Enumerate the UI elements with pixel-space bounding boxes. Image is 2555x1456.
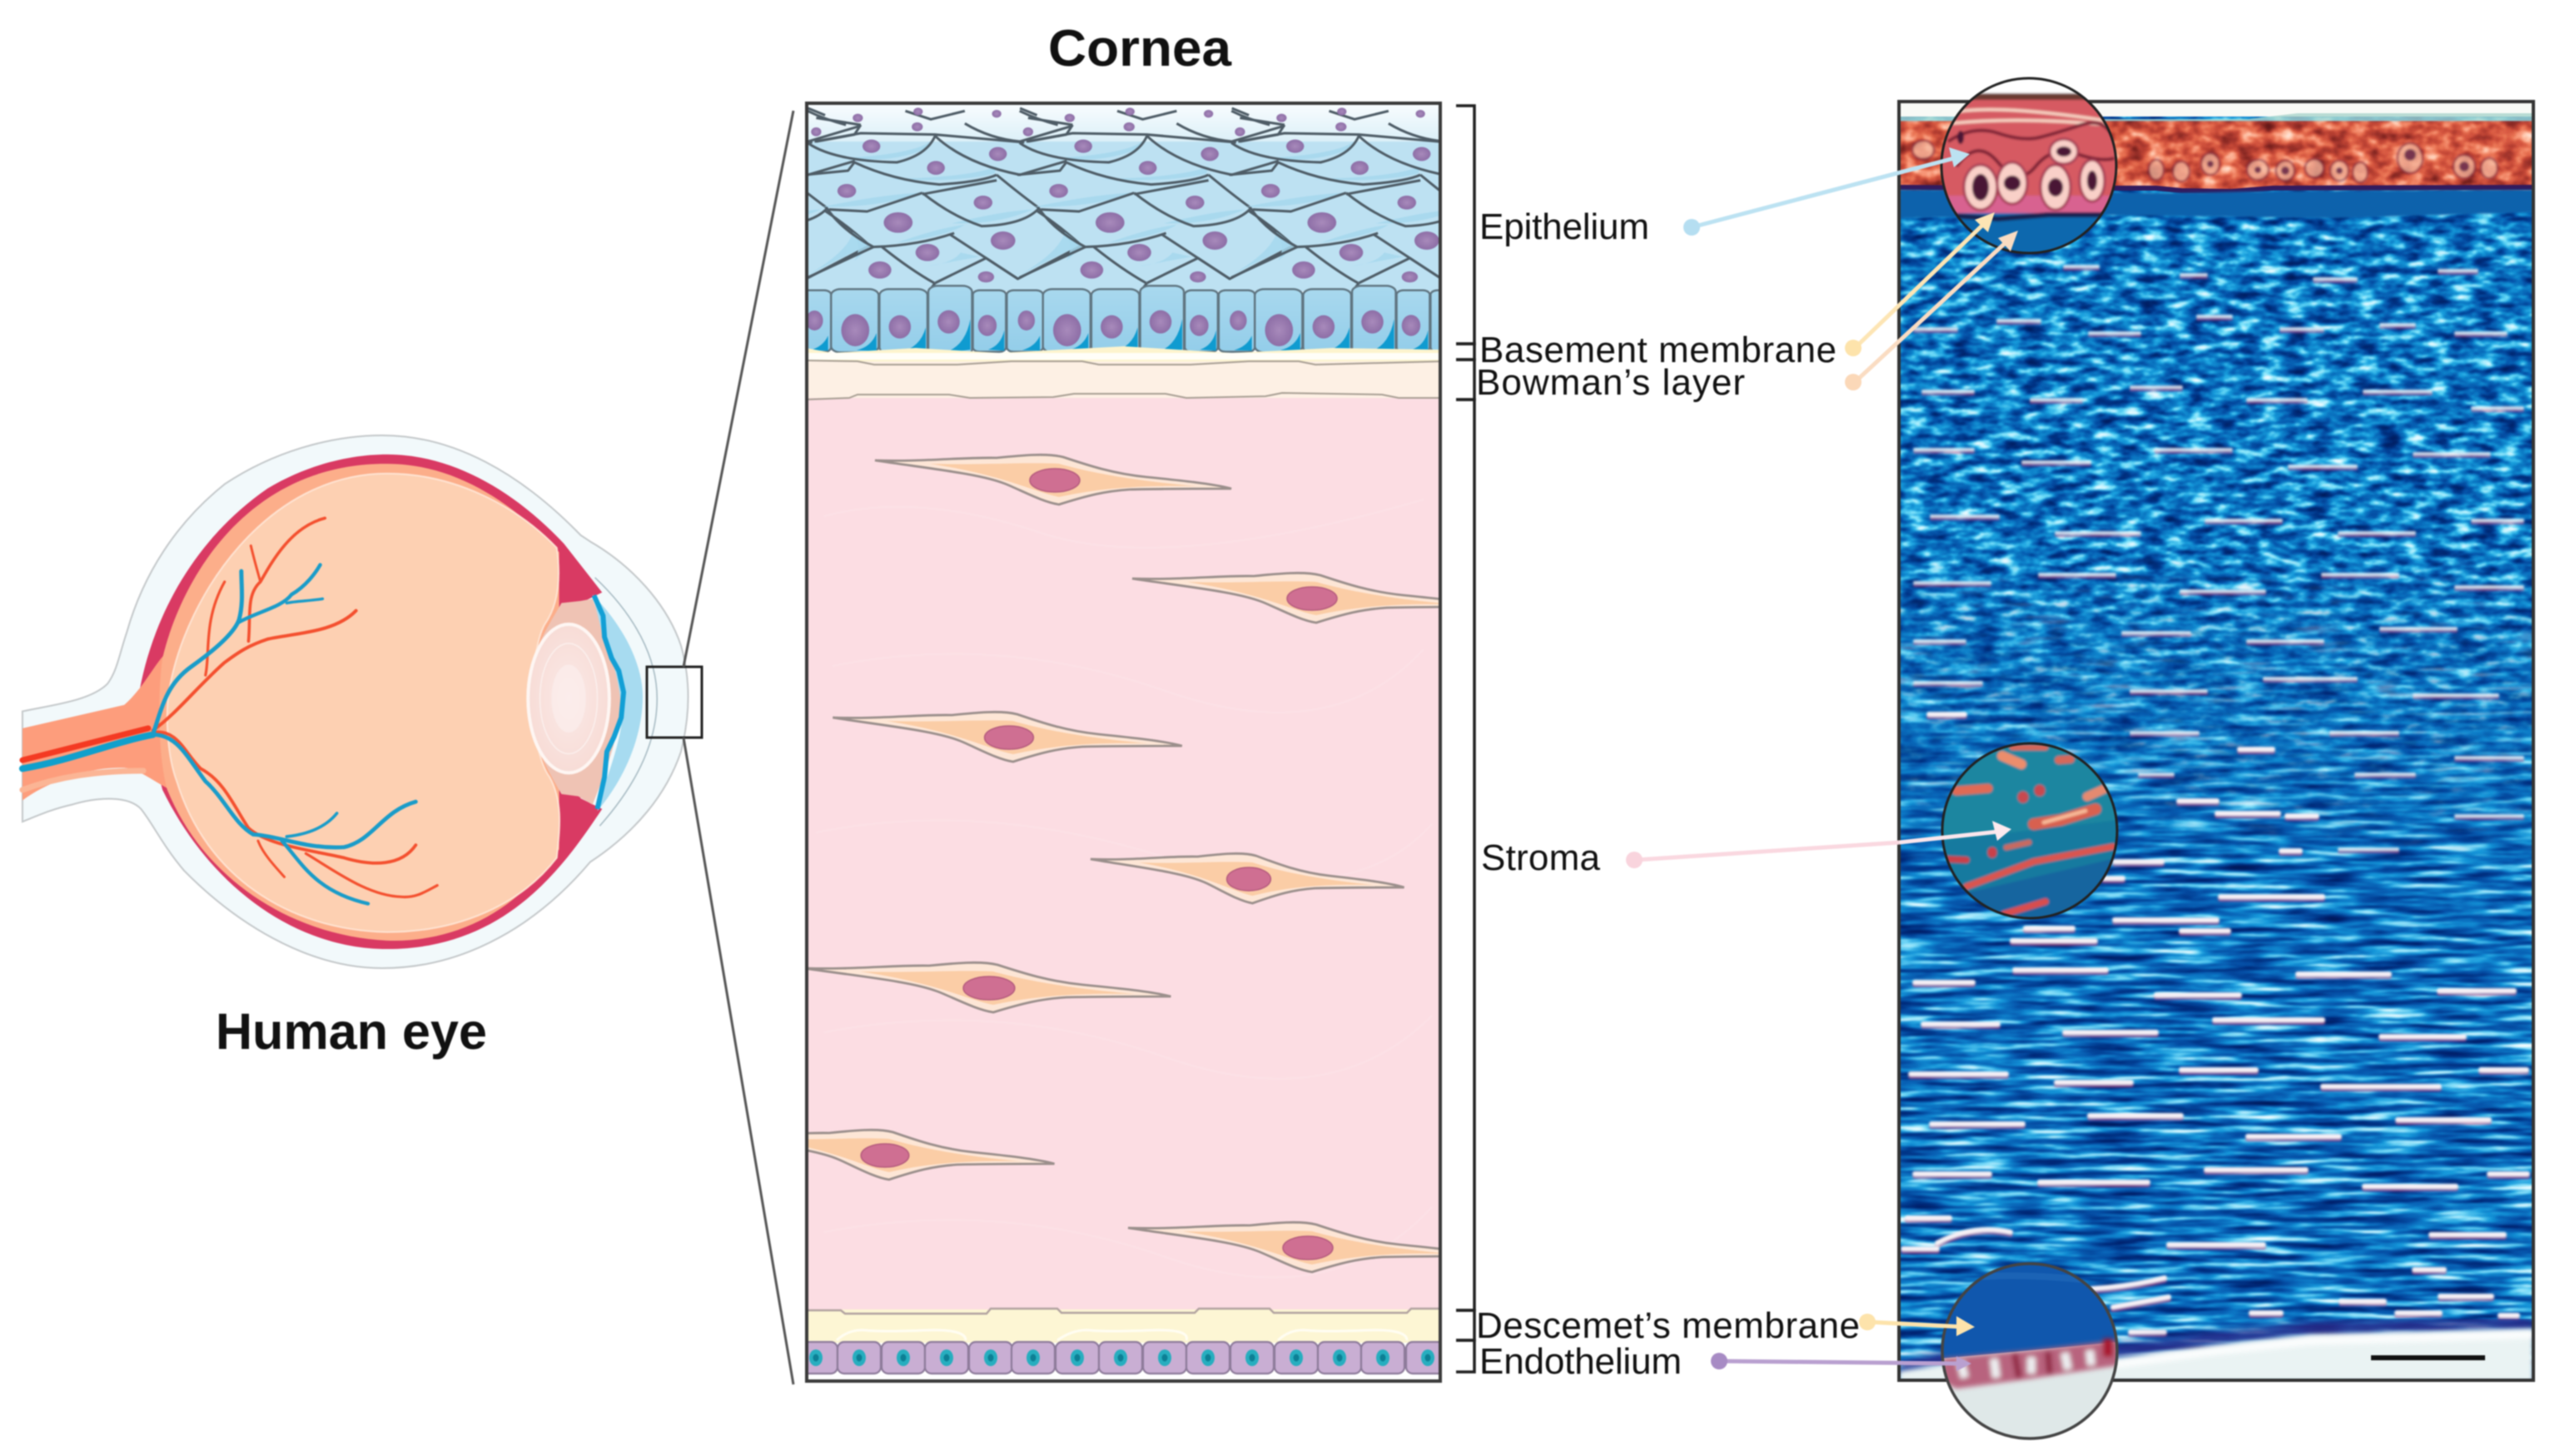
label: Epithelium: Epithelium [1479,206,1649,247]
callout: Bowman's layer dot and arrow [1845,231,2018,390]
eye: ciliary body and iris [528,599,621,805]
eye: choroid red band [138,455,602,949]
keratocyte cells [713,455,1489,1272]
layer brackets [1456,106,1474,1372]
callout: Descemet's membrane dot and arrow [1859,1314,1975,1336]
layer labels [1476,206,1860,1382]
basement membrane and Bowman's layer [806,346,1442,400]
eye: cornea dark inner edge [594,595,624,809]
eye: retinal arteries [153,518,437,897]
inset circle: epithelium magnified [1940,75,2119,259]
inset circle: Descemet's membrane and endothelium magnified [1940,1261,2119,1440]
callout: Stroma dot and arrow [1626,821,2011,868]
stroma texture [1899,102,2533,1380]
panel border [807,103,1440,1381]
panel border [1899,102,2533,1380]
Descemet's membrane [806,1309,1442,1343]
endothelium cells [794,1342,1449,1374]
eye: cornea aqueous blue [593,594,643,811]
callout: Epithelium dot and arrow [1683,147,1970,236]
zoom lines from eye to cornea panel [683,111,793,1384]
inset circle: stroma magnified [1940,741,2119,924]
label: Stroma: Stroma [1481,837,1601,878]
eye: vitreous body [167,474,559,932]
title: Human eye: Human eye [216,1003,487,1060]
label: Descemet's membrane: Descemet’s membrane [1476,1305,1860,1346]
label: Endothelium: Endothelium [1479,1341,1682,1382]
eye: cornea inner line [595,578,657,826]
callout: Endothelium dot and arrow [1711,1353,1971,1371]
eye: retina [159,464,559,941]
epithelium band [1899,121,2533,191]
callout: Basement membrane dot and arrow [1845,212,1995,356]
magnified cells [1964,139,2105,210]
stroma layer with keratocytes [808,398,1439,1310]
scale bar [2371,1355,2485,1360]
eye: optic nerve [22,654,175,801]
eye: sclera outer shell [22,435,688,968]
top white strip [1899,102,2533,117]
panel: histology micrograph [1899,102,2533,1382]
illustration: human eye cross-section [22,435,688,968]
magnified red fibroblast streaks [1948,748,2113,914]
panel: cornea layers illustration [594,103,1505,1381]
label: Basement membrane: Basement membrane [1479,330,1837,370]
epithelium layer [594,104,1505,355]
title: Cornea: Cornea [1048,20,1232,77]
eye: lens [528,624,609,773]
zoom box on eye [647,667,702,738]
bottom tissue edge and background [1899,1324,2533,1382]
basal epithelial cells [808,284,1439,354]
eye: optic nerve vessels [22,728,153,790]
Bowman's layer band [1899,190,2533,218]
label: Bowman's layer: Bowman’s layer [1476,362,1745,403]
magnified endothelium cells [1942,1339,2119,1389]
eye: retinal veins [153,564,415,903]
